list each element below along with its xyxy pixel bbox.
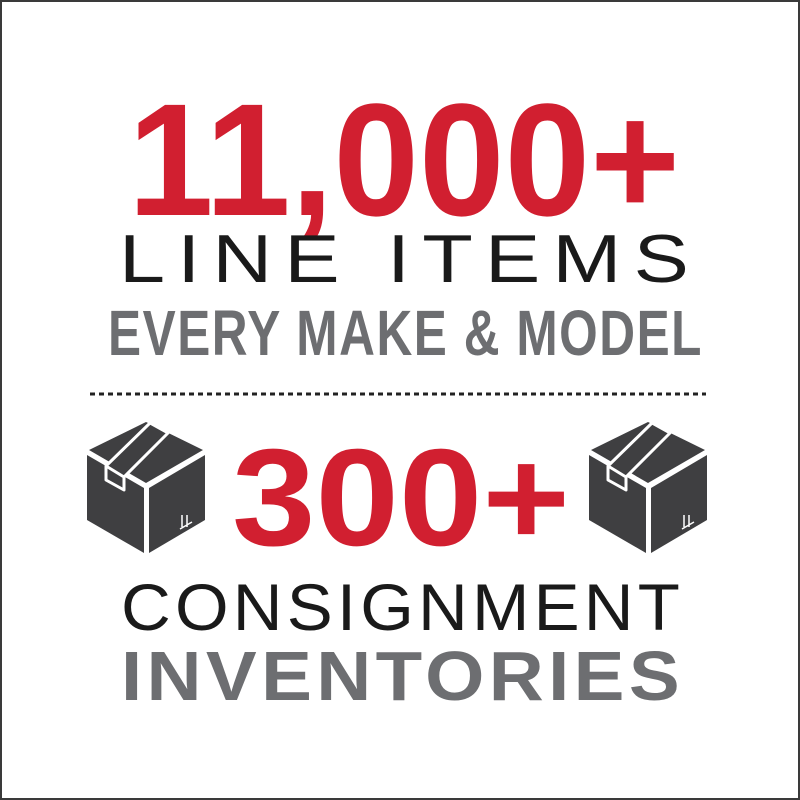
heading: 11,000+: 11,000+ (128, 70, 680, 249)
text: LINE ITEMS: LINE ITEMS (119, 221, 701, 297)
icon: box right (589, 422, 707, 553)
text: INVENTORIES: INVENTORIES (121, 637, 684, 715)
heading: 300+: 300+ (232, 421, 570, 575)
icon: box left (87, 422, 205, 553)
dotted divider (90, 392, 706, 396)
text: CONSIGNMENT: CONSIGNMENT (121, 570, 684, 644)
